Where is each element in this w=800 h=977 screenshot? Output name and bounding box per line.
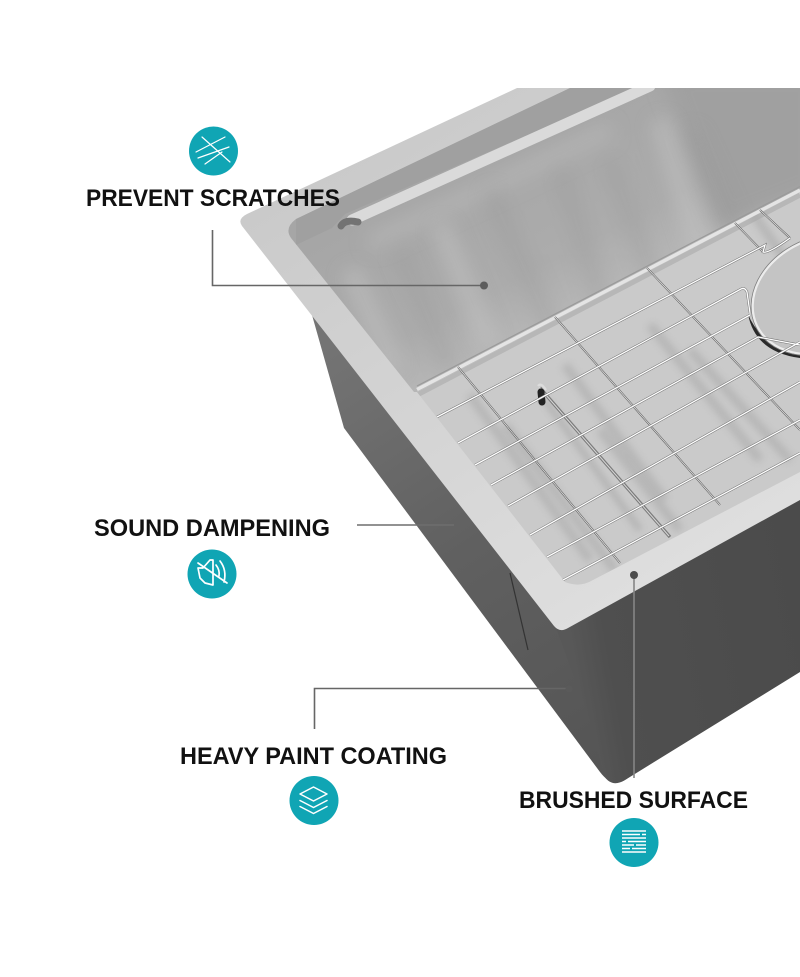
stainless rim	[240, 88, 800, 630]
grid cross wires	[458, 210, 800, 563]
icon: stacked layers	[290, 776, 338, 825]
heading: heavy paint coating: HEAVY PAINT COATING	[180, 743, 447, 770]
icon: muted speaker	[188, 550, 236, 598]
heading: prevent scratches: PREVENT SCRATCHES	[86, 185, 340, 212]
drain rod and pin	[538, 385, 670, 537]
wall rail groove	[352, 86, 650, 220]
heading: sound dampening: SOUND DAMPENING	[94, 515, 330, 542]
leader line: brushed surface	[630, 571, 638, 778]
icon: brushed lines	[610, 818, 658, 867]
leader line: heavy paint coating	[314, 686, 572, 729]
sink floor	[410, 190, 800, 590]
leader line: sound dampening	[357, 524, 454, 526]
sink body side face	[312, 315, 640, 783]
icon: scratches	[189, 126, 238, 176]
heading: brushed surface: BRUSHED SURFACE	[519, 787, 748, 814]
drain ring	[731, 212, 800, 378]
sink back wall	[280, 70, 800, 398]
leader line: prevent scratches	[212, 230, 488, 290]
sink body front face	[556, 496, 800, 783]
sink product photo	[240, 70, 800, 783]
floor fillet highlight	[417, 190, 800, 390]
grid long wires	[437, 238, 800, 580]
side flap seam	[510, 573, 528, 650]
